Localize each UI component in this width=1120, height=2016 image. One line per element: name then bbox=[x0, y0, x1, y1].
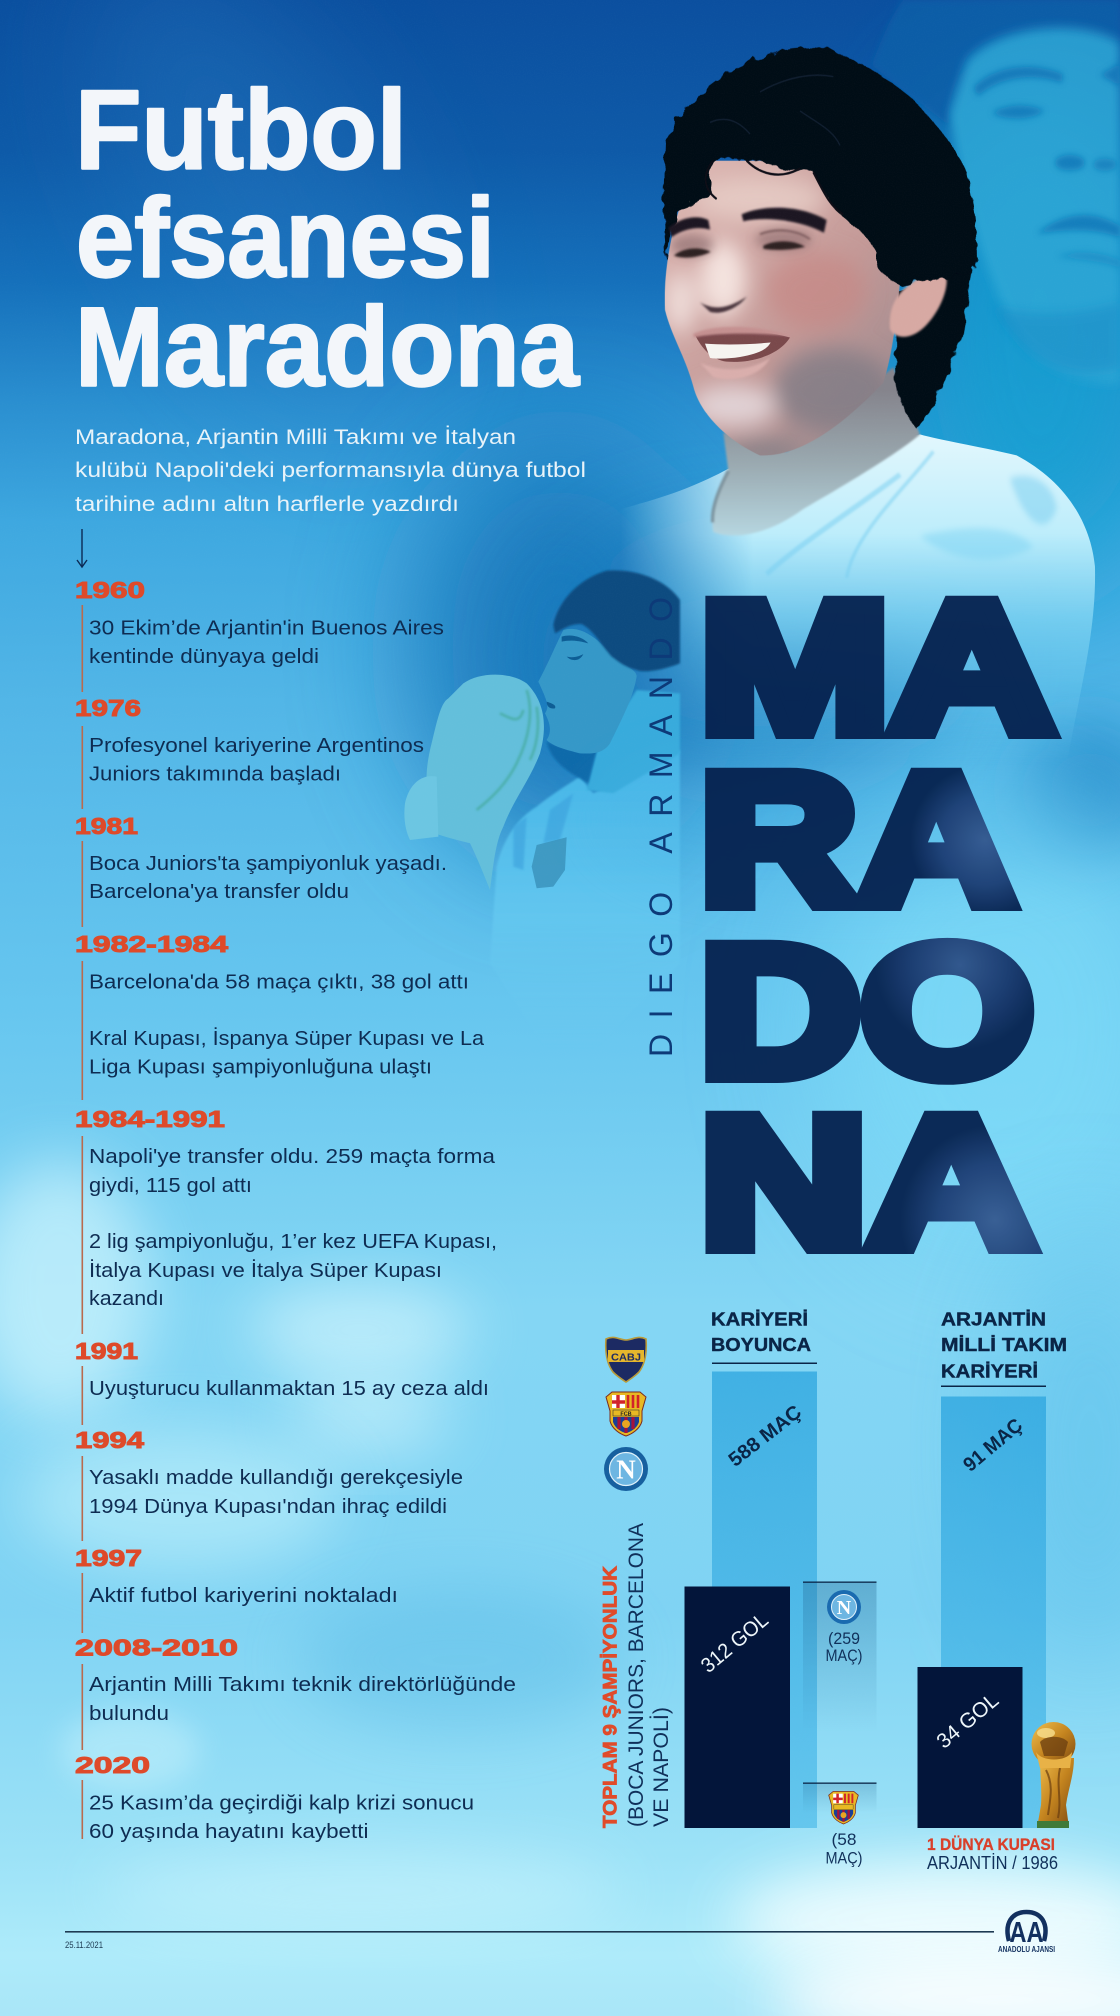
trophy being kissed bbox=[426, 675, 544, 890]
chart: career bars bbox=[684, 1310, 876, 1868]
vertical label: total championships bbox=[600, 1523, 673, 1828]
label: 58 matches bbox=[826, 1830, 862, 1868]
timeline bbox=[75, 577, 516, 1843]
vertical name: Diego Armando: DIEGO ARMANDO bbox=[643, 597, 679, 1057]
timeline entry 1960 bbox=[75, 577, 444, 692]
bar: 91 matches bbox=[941, 1396, 1046, 1828]
kissing figure face bbox=[538, 629, 637, 753]
timeline entry 1981: Barcelona'ya transfer oldu bbox=[89, 880, 349, 903]
icon: Napoli small: N bbox=[837, 1597, 852, 1619]
trophy streaks bbox=[477, 690, 538, 810]
timeline entry 1981 bbox=[75, 813, 447, 927]
portrait neck bbox=[712, 367, 920, 535]
portrait collar shadow bbox=[713, 471, 728, 522]
timeline entry 1960: 1960 bbox=[75, 577, 145, 603]
timeline entry 1997: 1997 bbox=[75, 1545, 142, 1571]
timeline entry 1997: Aktif futbol kariyerini noktaladı bbox=[89, 1584, 398, 1607]
photo: Maradona kissing the World Cup trophy bbox=[404, 570, 680, 1050]
timeline entry 1991 bbox=[75, 1338, 489, 1425]
portrait back hair bbox=[893, 268, 973, 431]
timeline entry 1994 bbox=[75, 1427, 463, 1541]
intro paragraph: tarihine adını altın harflerle yazdırdı bbox=[75, 493, 459, 516]
timeline entry 2020 bbox=[75, 1752, 474, 1843]
timeline entry 1982-1984: Barcelona'da 58 maça çıktı, 38 gol attı bbox=[89, 971, 469, 994]
timeline entry 1960: kentinde dünyaya geldi bbox=[89, 645, 319, 668]
heading: career: KARİYERİ bbox=[711, 1310, 808, 1330]
portrait hair strands over forehead bbox=[706, 161, 843, 214]
timeline entry 1984-1991: Napoli'ye transfer oldu. 259 maçta forma bbox=[89, 1145, 496, 1168]
portrait fade toward sky bbox=[600, 750, 1120, 890]
club crests bbox=[604, 1337, 648, 1491]
label: 34 goals: 34 GOL bbox=[932, 1689, 1003, 1753]
portrait ear bbox=[890, 274, 947, 337]
timeline entry 1976: 1976 bbox=[75, 695, 141, 721]
label: Argentina 1986: ARJANTİN / 1986 bbox=[927, 1853, 1058, 1873]
heading: career: BOYUNCA bbox=[711, 1335, 811, 1355]
vertical label: total championships: VE NAPOLİ) bbox=[650, 1707, 673, 1827]
portrait hair bbox=[664, 47, 977, 285]
timeline entry 1981: Boca Juniors'ta şampiyonluk yaşadı. bbox=[89, 852, 447, 875]
portrait eyebrows bbox=[668, 208, 827, 237]
heading: national team career: MİLLİ TAKIM bbox=[941, 1335, 1067, 1355]
footer rule bbox=[65, 1931, 994, 1933]
big name: MARADONA: MA bbox=[700, 565, 1054, 771]
intro paragraph: Maradona, Arjantin Milli Takımı ve İtalyan bbox=[75, 426, 516, 449]
club match column bbox=[803, 1582, 876, 1732]
timeline entry 2020: 60 yaşında hayatını kaybetti bbox=[89, 1820, 368, 1843]
icon: Napoli small bbox=[827, 1590, 861, 1624]
footer date: 25.11.2021 bbox=[65, 1940, 103, 1951]
timeline entry 2008-2010 bbox=[75, 1634, 516, 1750]
icon: Boca Juniors crest: CABJ bbox=[611, 1352, 641, 1364]
icon: Barcelona small bbox=[829, 1791, 858, 1824]
second club column bbox=[803, 1783, 876, 1813]
photo: ghosted large face top right bbox=[872, 0, 1120, 383]
logo: Anadolu Ajansı: AA bbox=[1010, 1917, 1044, 1949]
timeline entry 2008-2010: 2008-2010 bbox=[75, 1634, 238, 1660]
label: 259 matches bbox=[826, 1629, 862, 1665]
title: Maradona bbox=[75, 284, 580, 410]
icon: World Cup trophy bbox=[1032, 1722, 1076, 1828]
timeline entry 1984-1991: 1984-1991 bbox=[75, 1106, 225, 1132]
timeline entry 1984-1991: 2 lig şampiyonluğu, 1’er kez UEFA Kupası, bbox=[89, 1230, 497, 1253]
timeline entry 1994: 1994 bbox=[75, 1427, 144, 1453]
big name: MARADONA: RA bbox=[700, 737, 1015, 943]
label: 259 matches: MAÇ) bbox=[826, 1646, 862, 1665]
photo: smiling portrait of Maradona bbox=[620, 47, 1095, 765]
portrait face bbox=[664, 160, 900, 456]
trophy hand bbox=[404, 776, 438, 840]
ghost chin shadow bbox=[993, 302, 1120, 373]
timeline entry 1982-1984: 1982-1984 bbox=[75, 931, 228, 957]
timeline entry 1991: Uyuşturucu kullanmaktan 15 ay ceza aldı bbox=[89, 1377, 489, 1400]
timeline entry 2008-2010: Arjantin Milli Takımı teknik direktörlüğünde bbox=[89, 1673, 516, 1696]
label: 91 matches: 91 MAÇ bbox=[959, 1414, 1027, 1476]
shirt badge bbox=[532, 837, 567, 888]
timeline entry 1994: Yasaklı madde kullandığı gerekçesiyle bbox=[89, 1466, 463, 1489]
vertical label: total championships: (BOCA JUNIORS, BARCELONA bbox=[625, 1523, 648, 1827]
vertical label: total championships: TOPLAM 9 ŞAMPİYONLUK bbox=[600, 1566, 622, 1828]
timeline entry 1982-1984: Kral Kupası, İspanya Süper Kupası ve La bbox=[89, 1027, 485, 1050]
shadow under chin bbox=[547, 742, 597, 783]
logo: Anadolu Ajansı: ANADOLU AJANSI bbox=[998, 1944, 1055, 1954]
ghost face features bbox=[973, 63, 1120, 268]
label: 588 matches: 588 MAÇ bbox=[725, 1401, 806, 1471]
timeline entry 1991: 1991 bbox=[75, 1338, 138, 1364]
label: 259 matches: (259 bbox=[828, 1629, 860, 1648]
divider with Napoli share bbox=[803, 1582, 876, 1583]
logo: Anadolu Ajansı bbox=[998, 1912, 1055, 1954]
label: 312 goals: 312 GOL bbox=[697, 1608, 773, 1678]
timeline entry 1982-1984: Liga Kupası şampiyonluğuna ulaştı bbox=[89, 1055, 432, 1078]
heading: national team career: KARİYERİ bbox=[941, 1362, 1038, 1382]
timeline entry 1976 bbox=[75, 695, 424, 809]
timeline entry 1982-1984 bbox=[75, 931, 485, 1100]
title: Futbol bbox=[75, 68, 407, 192]
big name: MARADONA bbox=[700, 565, 1054, 1286]
portrait mouth bbox=[693, 327, 792, 379]
portrait hair highlights bbox=[710, 75, 840, 145]
portrait shirt bbox=[620, 434, 1095, 765]
timeline entry 1960: 30 Ekim’de Arjantin'in Buenos Aires bbox=[89, 616, 444, 640]
bar: 34 goals bbox=[918, 1667, 1022, 1828]
big name: MARADONA: NA bbox=[700, 1080, 1035, 1286]
divider with Barcelona share bbox=[803, 1782, 876, 1784]
bar: 588 matches bbox=[712, 1372, 817, 1828]
timeline entry 1976: Juniors takımında başladı bbox=[89, 762, 341, 786]
timeline entry 1981: 1981 bbox=[75, 813, 138, 839]
timeline entry 1984-1991: giydi, 115 gol attı bbox=[89, 1174, 252, 1197]
portrait eyes bbox=[674, 230, 810, 258]
kissing figure facial details bbox=[547, 635, 588, 709]
timeline entry 1976: Profesyonel kariyerine Argentinos bbox=[89, 734, 424, 757]
title bbox=[75, 68, 580, 410]
icon: Boca Juniors crest bbox=[606, 1337, 646, 1382]
shirt stripes bbox=[513, 793, 573, 870]
heading: career bbox=[711, 1310, 817, 1364]
label: 58 matches: (58 bbox=[832, 1830, 856, 1849]
icon: Barcelona crest: FCB bbox=[620, 1412, 632, 1418]
kissing figure shirt and body bbox=[490, 750, 680, 1050]
chart: national team bars bbox=[918, 1310, 1076, 1873]
heading: national team career: ARJANTİN bbox=[941, 1310, 1046, 1330]
timeline entry 2020: 2020 bbox=[75, 1752, 150, 1778]
title: efsanesi bbox=[76, 176, 495, 300]
portrait eye socket shadows bbox=[670, 228, 812, 256]
timeline entry 1997 bbox=[75, 1545, 398, 1633]
timeline entry 2008-2010: bulundu bbox=[89, 1702, 169, 1725]
timeline entry 1984-1991: kazandı bbox=[89, 1287, 164, 1310]
heading: national team career bbox=[941, 1310, 1067, 1387]
label: world cup: 1 DÜNYA KUPASI bbox=[927, 1835, 1055, 1854]
icon: Napoli crest: N bbox=[616, 1454, 636, 1484]
intro paragraph: kulübü Napoli'deki performansıyla dünya futbol bbox=[75, 459, 586, 482]
timeline entry 1984-1991: İtalya Kupası ve İtalya Süper Kupası bbox=[89, 1259, 442, 1282]
icon: Napoli crest bbox=[604, 1447, 648, 1491]
bar: 312 goals bbox=[684, 1586, 790, 1828]
portrait nose shadow bbox=[700, 297, 747, 313]
icon: Barcelona crest bbox=[606, 1392, 646, 1436]
timeline entry 2020: 25 Kasım’da geçirdiği kalp krizi sonucu bbox=[89, 1792, 474, 1815]
kissing figure neck bbox=[587, 690, 680, 793]
label: 58 matches: MAÇ) bbox=[826, 1848, 862, 1868]
timeline entry 1994: 1994 Dünya Kupası'ndan ihraç edildi bbox=[89, 1495, 447, 1518]
big name: MARADONA: DO bbox=[700, 909, 1034, 1115]
intro paragraph bbox=[75, 426, 586, 516]
kissing figure hair bbox=[553, 570, 680, 671]
icon: down arrow bbox=[77, 529, 87, 567]
timeline entry 1984-1991 bbox=[75, 1106, 497, 1334]
